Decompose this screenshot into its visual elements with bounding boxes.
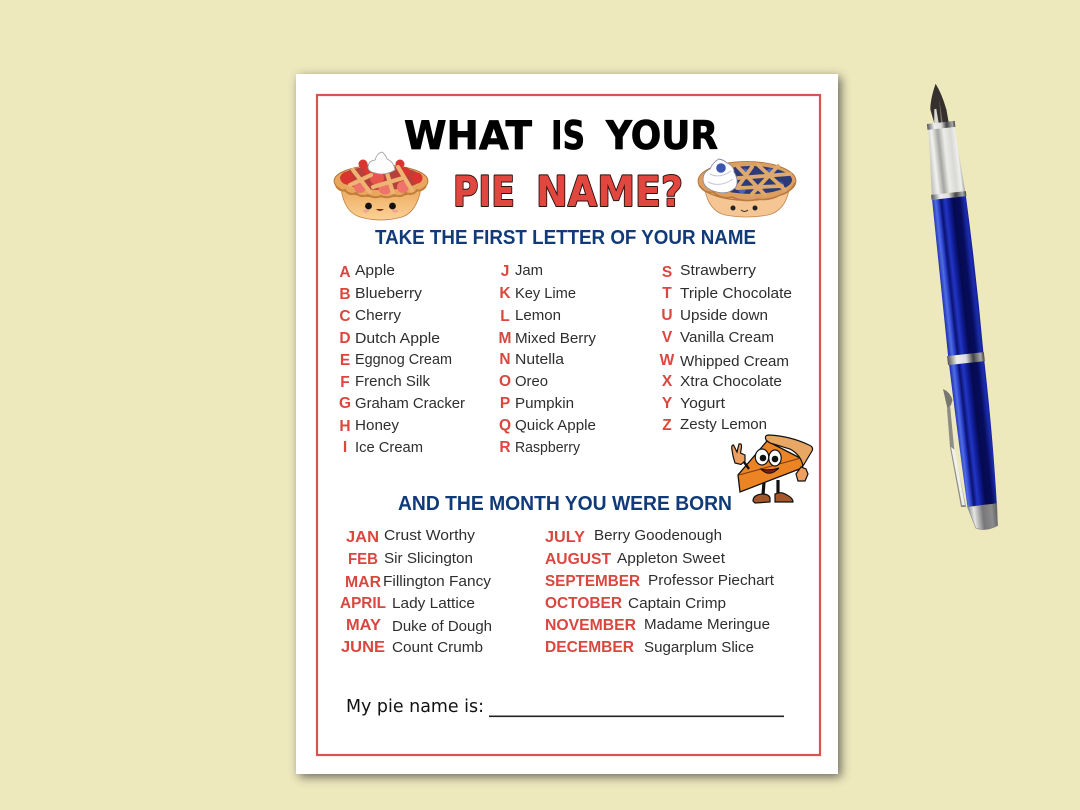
letters column 1: D: [339, 330, 351, 347]
pen barrel: [931, 196, 1000, 507]
letters column 3: Z: [662, 417, 672, 434]
months column 2: Sugarplum Slice: [644, 640, 754, 656]
letters column 2: Lemon: [515, 308, 561, 324]
letters column 3: X: [662, 373, 673, 390]
months column 1: Fillington Fancy: [383, 574, 492, 590]
letters column 3: T: [662, 285, 672, 302]
title: what is your: [404, 114, 718, 159]
letters column 1: I: [343, 439, 347, 456]
months column 2: DECEMBER: [545, 639, 634, 656]
icon: strawberry pie: [334, 152, 428, 220]
letters column 2: [499, 263, 597, 456]
letters column 2: Key Lime: [515, 286, 576, 302]
letters column 1: Graham Cracker: [355, 396, 465, 412]
letters column 2: P: [500, 395, 510, 412]
months column 2: Professor Piechart: [648, 573, 774, 589]
letters column 3: V: [662, 329, 673, 346]
title: pie name: [453, 167, 683, 216]
letters column 2: Mixed Berry: [515, 331, 597, 347]
letters column 2: Jam: [515, 263, 543, 279]
letters column 3: Upside down: [680, 308, 768, 324]
months column 2: Appleton Sweet: [617, 551, 725, 567]
letters column 1: French Silk: [355, 374, 431, 390]
pen grip: [923, 121, 966, 200]
months column 1: Lady Lattice: [392, 596, 475, 612]
months column 2: NOVEMBER: [545, 617, 636, 634]
letters column 3: Y: [662, 395, 673, 412]
letters column 2: L: [500, 308, 510, 325]
months column 1: Duke of Dough: [392, 619, 492, 635]
letters column 3: Triple Chocolate: [680, 286, 792, 302]
months column 1: [340, 528, 492, 656]
letters column 1: Honey: [355, 418, 400, 434]
icon: blueberry pie: [698, 159, 796, 217]
months column 2: Berry Goodenough: [594, 528, 722, 544]
months column 1: MAR: [345, 574, 381, 591]
title: what is your: IS: [551, 114, 585, 159]
pen end cap: [967, 504, 999, 531]
letters column 3: Zesty Lemon: [680, 417, 767, 433]
letters column 3: Vanilla Cream: [680, 330, 774, 346]
letters column 2: Q: [499, 417, 511, 434]
title: what is your: WHAT: [404, 114, 532, 159]
letters column 3: Whipped Cream: [680, 354, 789, 370]
months column 1: FEB: [348, 551, 378, 568]
letters column 3: S: [662, 264, 672, 281]
letters column 3: Yogurt: [680, 396, 725, 412]
letters column 2: Quick Apple: [515, 418, 596, 434]
letters column 2: R: [499, 439, 511, 456]
heading: month born: AND THE MONTH YOU WERE BORN: [398, 493, 732, 515]
pen nib: [928, 83, 949, 126]
answer line: My pie name is:: [346, 696, 484, 717]
icon: fountain pen: [918, 82, 1003, 532]
letters column 1: Blueberry: [355, 286, 423, 302]
title: what is your: YOUR: [605, 114, 718, 159]
months column 1: Sir Slicington: [384, 551, 473, 567]
letters column 2: Raspberry: [515, 440, 581, 456]
title: pie name: NAME?: [536, 167, 683, 216]
months column 1: MAY: [346, 617, 381, 634]
months column 1: APRIL: [340, 595, 386, 612]
pen ring: [947, 352, 985, 365]
letters column 2: N: [499, 351, 511, 368]
letters column 1: Dutch Apple: [355, 331, 440, 347]
letters column 1: Apple: [355, 263, 395, 279]
letters column 1: A: [339, 264, 351, 281]
letters column 3: Xtra Chocolate: [680, 374, 782, 390]
letters column 2: O: [499, 373, 511, 390]
letters column 1: E: [340, 352, 350, 369]
letters column 1: [339, 263, 465, 456]
letters column 3: Strawberry: [680, 263, 757, 279]
letters column 3: U: [661, 307, 673, 324]
months column 2: Madame Meringue: [644, 617, 770, 633]
letters column 1: Ice Cream: [355, 440, 423, 456]
letters column 1: Eggnog Cream: [355, 352, 452, 368]
letters column 1: Cherry: [355, 308, 402, 324]
icon: pen clip: [943, 389, 966, 507]
letters column 2: Pumpkin: [515, 396, 574, 412]
months column 1: Crust Worthy: [384, 528, 476, 544]
title: pie name: PIE: [453, 167, 515, 216]
letters column 3: W: [660, 352, 675, 369]
letters column 2: J: [501, 263, 509, 280]
months column 2: [545, 528, 774, 656]
icon: pie slice mascot: [732, 435, 813, 503]
months column 2: OCTOBER: [545, 595, 622, 612]
panel: worksheet paper: [296, 74, 838, 774]
letters column 3: [660, 263, 792, 434]
months column 1: JUNE: [341, 639, 385, 656]
letters column 2: Oreo: [515, 374, 548, 390]
letters column 2: Nutella: [515, 352, 565, 368]
months column 2: JULY: [545, 529, 585, 546]
letters column 2: K: [499, 285, 511, 302]
letters column 1: H: [339, 418, 351, 435]
letters column 1: B: [339, 286, 351, 303]
months column 2: SEPTEMBER: [545, 573, 640, 590]
letters column 1: G: [339, 395, 351, 412]
heading: first letter: TAKE THE FIRST LETTER OF YOUR NAME: [375, 227, 756, 249]
months column 2: AUGUST: [545, 551, 611, 568]
letters column 1: F: [340, 374, 350, 391]
months column 1: Count Crumb: [392, 640, 483, 656]
months column 2: Captain Crimp: [628, 596, 726, 612]
months column 1: JAN: [346, 529, 379, 546]
letters column 1: C: [339, 308, 351, 325]
letters column 2: M: [499, 330, 511, 347]
paper sheet shadow: [299, 77, 841, 777]
